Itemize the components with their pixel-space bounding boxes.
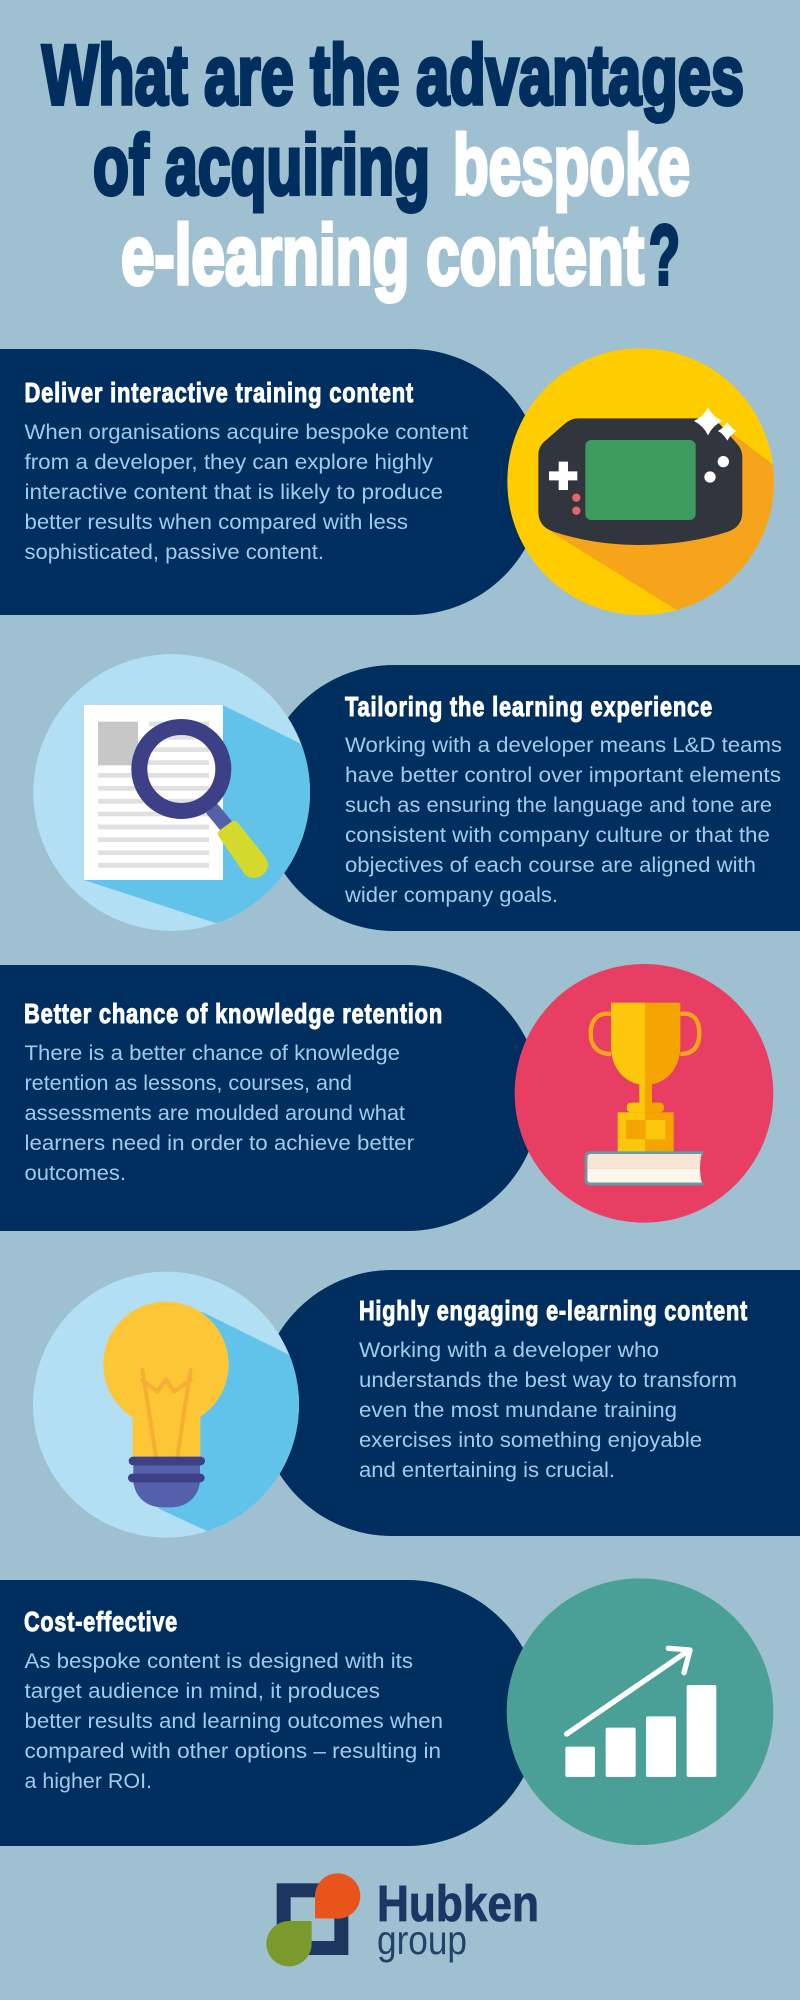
body text: learners need in order to achieve better — [24, 1130, 414, 1155]
panel background — [0, 965, 540, 1231]
body text: understands the best way to transform — [359, 1367, 737, 1392]
panel background — [261, 665, 800, 931]
heading: Cost-effective — [24, 1606, 178, 1637]
logo wordmark — [377, 1875, 539, 1963]
body text: consistent with company culture or that the — [345, 822, 770, 847]
body text: exercises into something enjoyable — [359, 1427, 702, 1452]
body text: wider company goals. — [344, 882, 558, 907]
body text: better results when compared with less — [24, 509, 408, 534]
title: of acquiring — [93, 118, 430, 212]
body text: and entertaining is crucial. — [359, 1457, 615, 1482]
icon: document and magnifying glass — [33, 654, 310, 931]
body text — [24, 1040, 414, 1185]
body text: sophisticated, passive content. — [24, 539, 324, 564]
logo wordmark: group — [377, 1917, 467, 1963]
body text: Working with a developer means L&D teams — [345, 732, 782, 757]
title — [42, 28, 744, 302]
body text: better results and learning outcomes when — [24, 1708, 443, 1733]
body text: target audience in mind, it produces — [24, 1678, 380, 1703]
panel: tailoring the learning experience — [33, 654, 800, 956]
logo: Hubken group — [266, 1873, 539, 1966]
panel: deliver interactive training content — [0, 348, 774, 615]
heading: Deliver interactive training content — [24, 377, 414, 408]
panel: better chance of knowledge retention — [0, 964, 773, 1231]
body text: When organisations acquire bespoke content — [24, 419, 468, 444]
body text: a higher ROI. — [24, 1768, 152, 1793]
icon: game console — [507, 348, 774, 615]
panel: highly engaging e-learning content — [33, 1270, 800, 1538]
body text: There is a better chance of knowledge — [24, 1040, 400, 1065]
body text: retention as lessons, courses, and — [24, 1070, 352, 1095]
body text: have better control over important elements — [345, 762, 781, 787]
heading: Better chance of knowledge retention — [24, 998, 443, 1029]
logo mark — [266, 1873, 360, 1966]
body text: assessments are moulded around what — [24, 1100, 405, 1125]
body text: such as ensuring the language and tone are — [345, 792, 772, 817]
body text: objectives of each course are aligned with — [345, 852, 756, 877]
heading: Tailoring the learning experience — [345, 691, 713, 722]
icon: light bulb — [33, 1272, 299, 1538]
body text — [359, 1337, 737, 1482]
body text: As bespoke content is designed with its — [24, 1648, 413, 1673]
body text: even the most mundane training — [359, 1397, 677, 1422]
title: bespoke — [453, 118, 690, 212]
body text: outcomes. — [24, 1160, 126, 1185]
body text — [344, 732, 782, 907]
body text: Working with a developer who — [359, 1337, 659, 1362]
panel background — [0, 349, 543, 615]
body text: from a developer, they can explore highly — [24, 449, 433, 474]
logo wordmark: Hubken — [377, 1875, 539, 1932]
icon: trophy on a book — [515, 964, 773, 1223]
body text: interactive content that is likely to produce — [24, 479, 443, 504]
title: ? — [649, 208, 680, 302]
panel background — [0, 1580, 540, 1846]
body text: compared with other options – resulting in — [24, 1738, 441, 1763]
panel background — [259, 1270, 800, 1536]
icon: rising bar chart — [507, 1578, 773, 1845]
panel: cost-effective — [0, 1578, 773, 1846]
body text — [24, 1648, 443, 1793]
body text — [24, 419, 468, 564]
